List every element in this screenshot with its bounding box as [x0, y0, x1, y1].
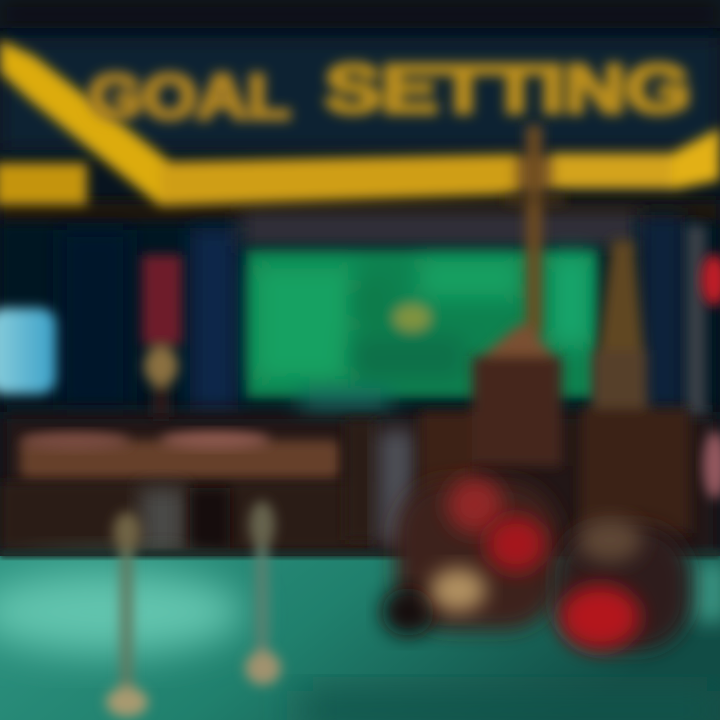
- illustration: wooden towers and pole: [420, 125, 690, 533]
- table: [0, 420, 414, 550]
- panel: green board: [246, 250, 598, 410]
- yellow ribbon lines: [0, 40, 720, 206]
- posts: [106, 501, 281, 717]
- banner: red flag: [142, 255, 182, 417]
- title: goal setting: SETTING: [325, 51, 691, 127]
- title: goal setting: [88, 51, 691, 132]
- panel: blue screen: [0, 308, 56, 394]
- floor: [0, 550, 720, 720]
- illustration: pile with red balls: [382, 431, 720, 650]
- title: goal setting: GOAL: [88, 63, 290, 132]
- icon: red light on right: [640, 215, 720, 415]
